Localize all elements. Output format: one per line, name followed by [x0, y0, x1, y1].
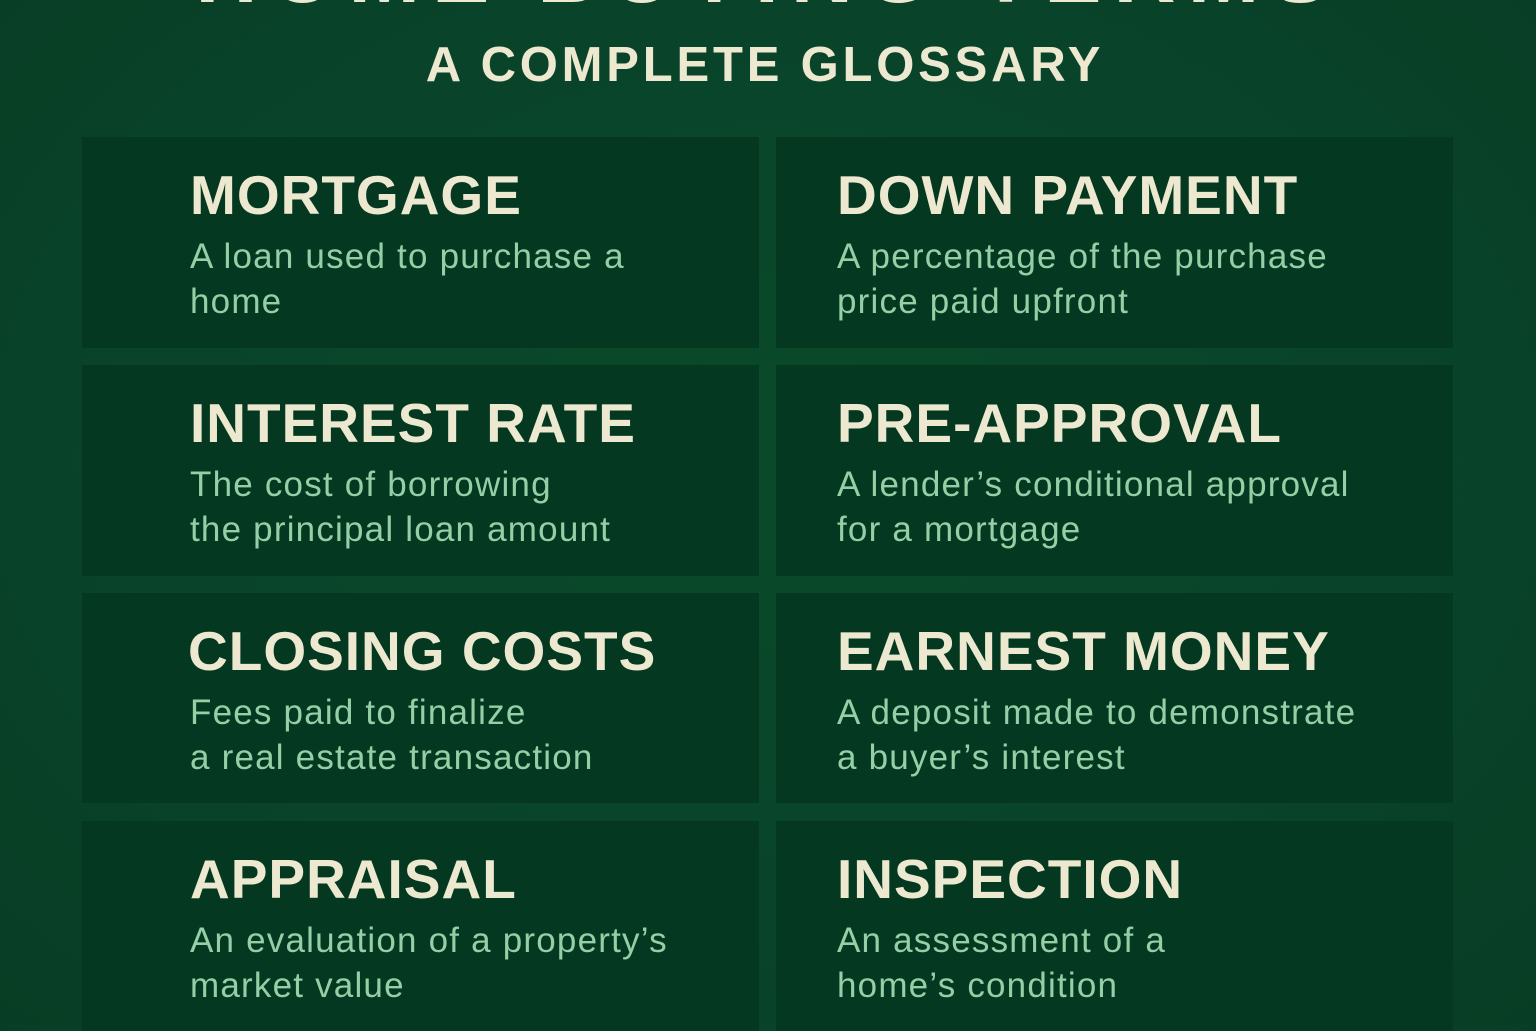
panel: appraisal	[82, 821, 759, 1031]
definition: down payment	[837, 237, 1328, 321]
definition: mortgage: A loan used to purchase a	[190, 237, 625, 276]
panel: interest rate	[82, 365, 759, 576]
heading: pre-approval: PRE-APPROVAL	[837, 392, 1282, 454]
definition: mortgage: home	[190, 282, 282, 321]
definition: interest rate: The cost of borrowing	[190, 465, 552, 504]
definition: closing costs	[190, 693, 594, 777]
panel: pre-approval	[776, 365, 1453, 576]
definition: earnest money	[837, 693, 1356, 777]
heading: earnest money: EARNEST MONEY	[837, 620, 1330, 682]
panel: earnest money	[776, 593, 1453, 803]
heading: down payment: DOWN PAYMENT	[837, 164, 1298, 226]
definition: closing costs: a real estate transaction	[190, 738, 594, 777]
definition: appraisal: An evaluation of a property’s	[190, 921, 668, 960]
definition: inspection: home’s condition	[837, 966, 1118, 1005]
heading: appraisal: APPRAISAL	[190, 848, 517, 910]
definition: interest rate: the principal loan amount	[190, 510, 611, 549]
definition: down payment: price paid upfront	[837, 282, 1129, 321]
definition: closing costs: Fees paid to finalize	[190, 693, 526, 732]
definition: down payment: A percentage of the purchase	[837, 237, 1328, 276]
definition: pre-approval: A lender’s conditional approval	[837, 465, 1350, 504]
definition: pre-approval: for a mortgage	[837, 510, 1081, 549]
panel: mortgage	[82, 137, 759, 348]
definition: interest rate	[190, 465, 611, 549]
definition: inspection: An assessment of a	[837, 921, 1166, 960]
heading: closing costs: CLOSING COSTS	[188, 620, 656, 682]
heading: inspection: INSPECTION	[837, 848, 1183, 910]
definition: earnest money: A deposit made to demonstrate	[837, 693, 1356, 732]
definition: mortgage	[190, 237, 625, 321]
definition: appraisal: market value	[190, 966, 405, 1005]
heading: interest rate: INTEREST RATE	[190, 392, 636, 454]
definition: appraisal	[190, 921, 668, 1005]
definition: earnest money: a buyer’s interest	[837, 738, 1126, 777]
heading: mortgage: MORTGAGE	[190, 164, 522, 226]
definition: pre-approval	[837, 465, 1350, 549]
panel: down payment	[776, 137, 1453, 348]
subtitle: A COMPLETE GLOSSARY	[426, 38, 1104, 92]
panel: closing costs	[82, 593, 759, 803]
panel: inspection	[776, 821, 1453, 1031]
definition: inspection	[837, 921, 1166, 1005]
